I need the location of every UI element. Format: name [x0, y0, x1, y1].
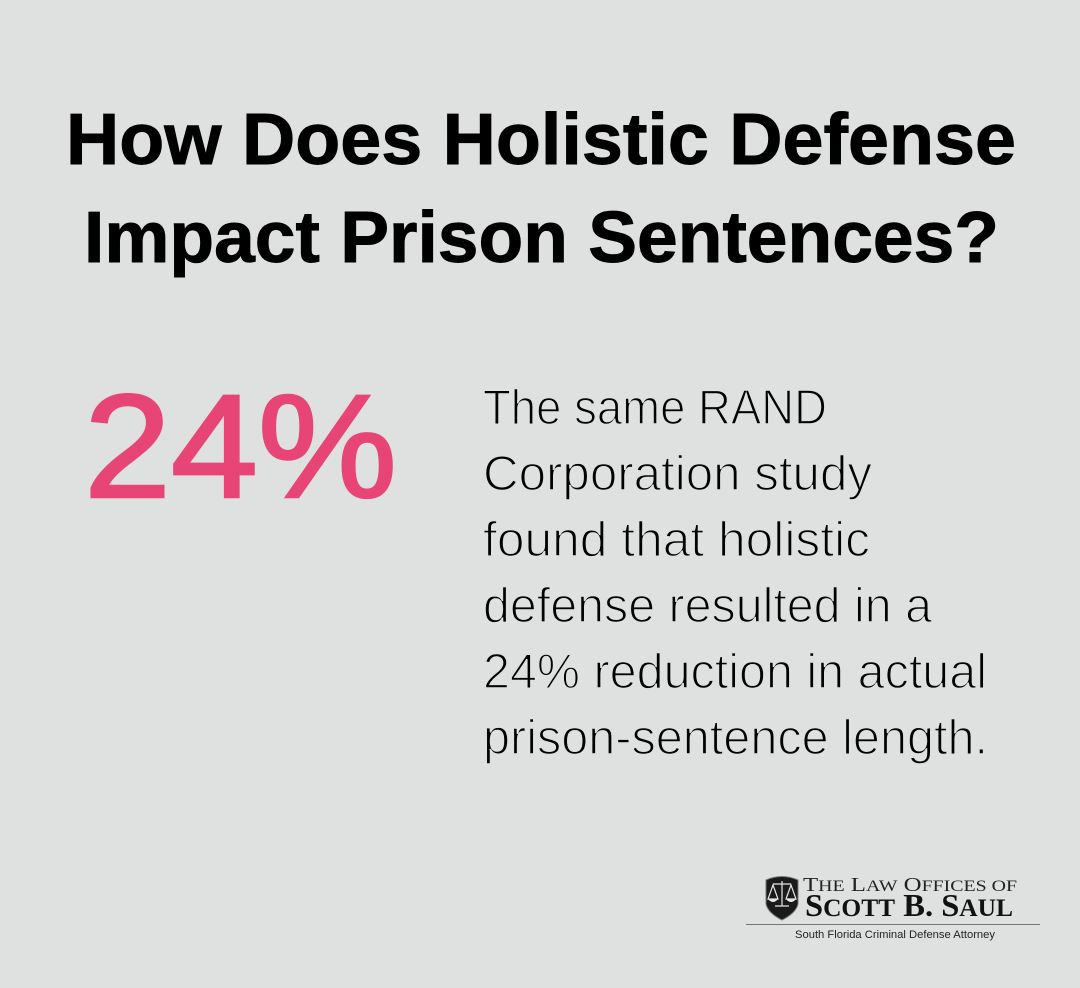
body text [483, 381, 988, 765]
logo firm name: SCOTT B. SAUL [805, 887, 1013, 923]
body text: found that holistic [483, 513, 870, 567]
body text: 24% reduction in actual [483, 645, 987, 699]
big statistic: 24%: 24% [84, 365, 397, 529]
logo divider [746, 924, 1040, 925]
logo firm name: THE L AW O FFICES OF [803, 874, 1017, 896]
title: How Does Holistic Defense [66, 100, 1016, 180]
body text: The same RAND [483, 381, 827, 435]
logo tagline: South Florida Criminal Defense Attorney [795, 929, 996, 941]
law offices logo [746, 874, 1040, 941]
title [66, 100, 1016, 278]
body text: defense resulted in a [483, 579, 933, 633]
body text: prison-sentence length. [483, 711, 988, 765]
icon: shield with scales [766, 876, 798, 920]
body text: Corporation study [483, 447, 872, 501]
title: Impact Prison Sentences? [84, 198, 999, 278]
